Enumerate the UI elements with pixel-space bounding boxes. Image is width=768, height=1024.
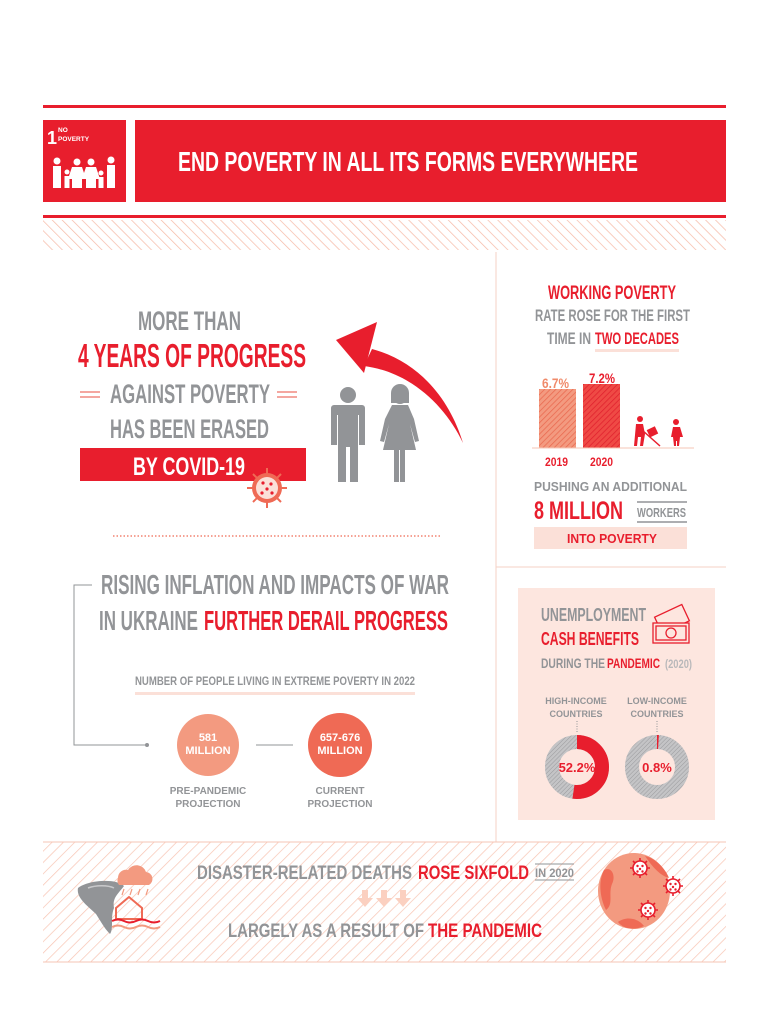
arrow: curved red (336, 322, 463, 443)
hatched band (43, 215, 726, 250)
donut chart: high-income: HIGH-INCOME (545, 696, 607, 706)
panel: unemployment cash benefits: (2020) (665, 657, 692, 671)
title banner (135, 120, 726, 202)
top red line (43, 105, 726, 108)
bar chart: 2020 (590, 455, 613, 469)
logo: SDG 1 no poverty (43, 120, 126, 202)
bar chart: 2019 (545, 455, 568, 469)
panel: disaster-related deaths: ROSE SIXFOLD (418, 863, 529, 884)
panel: disaster-related deaths: THE PANDEMIC (428, 921, 542, 942)
donut chart: high-income: COUNTRIES (549, 709, 603, 719)
icon: cash (653, 605, 689, 643)
chart: extreme poverty 2022: NUMBER OF PEOPLE LIVING IN EXTREME POVERTY IN 2022 (135, 674, 415, 688)
donut chart: high-income: 52.2% (559, 760, 596, 775)
panel: rising inflation: RISING INFLATION AND IMPACTS OF WAR (101, 569, 449, 600)
icon: tornado and flood (78, 865, 160, 934)
icon: workers (634, 416, 683, 446)
panel: 4 years of progress: BY COVID-19 (133, 453, 245, 481)
bar chart (532, 370, 694, 469)
chart: extreme poverty 2022: MILLION (317, 745, 363, 757)
panel: working poverty: TIME IN (547, 329, 591, 348)
logo: SDG 1 no poverty: POVERTY (58, 136, 90, 143)
panel: working poverty: WORKERS (637, 505, 686, 520)
bar chart: 7.2% (589, 370, 615, 386)
chart: extreme poverty 2022: PRE-PANDEMIC (170, 786, 246, 797)
panel: working poverty (532, 283, 694, 549)
panel: rising inflation: FURTHER DERAIL PROGRESS (204, 605, 448, 636)
panel: 4 years of progress (78, 306, 306, 481)
panel: disaster-related deaths: IN 2020 (535, 866, 574, 880)
donut chart: low-income: 0.8% (642, 760, 672, 775)
panel: working poverty: PUSHING AN ADDITIONAL (534, 479, 687, 494)
panel: 4 years of progress: HAS BEEN ERASED (110, 414, 269, 444)
chart: extreme poverty 2022: 657-676 (320, 732, 360, 744)
panel: disaster-related deaths (43, 842, 726, 962)
chart: extreme poverty 2022: PROJECTION (307, 799, 373, 810)
panel: 4 years of progress: MORE THAN (138, 306, 241, 336)
panel: working poverty: RATE ROSE FOR THE FIRST (535, 306, 690, 325)
panel: working poverty: 8 MILLION (534, 497, 623, 525)
dotted divider (113, 535, 440, 537)
panel: 4 years of progress: 4 YEARS OF PROGRESS (78, 337, 306, 374)
panel: unemployment cash benefits (518, 588, 715, 820)
panel: disaster-related deaths: DISASTER-RELATED DEATHS (197, 863, 412, 884)
chart: extreme poverty 2022: PROJECTION (175, 799, 241, 810)
panel: working poverty: WORKING POVERTY (548, 283, 676, 304)
donut chart: low-income: LOW-INCOME (627, 696, 687, 706)
icon: virus (247, 468, 287, 508)
panel: rising inflation: IN UKRAINE (99, 605, 198, 636)
panel: unemployment cash benefits: PANDEMIC (607, 655, 660, 671)
bar chart: 6.7% (542, 375, 569, 391)
panel: disaster-related deaths: LARGELY AS A RESULT OF (228, 921, 424, 942)
logo: SDG 1 no poverty: NO (58, 127, 68, 134)
donut chart: low-income (627, 696, 687, 792)
panel: working poverty: INTO POVERTY (567, 531, 657, 546)
donut chart: high-income (545, 696, 607, 792)
chart: extreme poverty 2022: MILLION (185, 745, 231, 757)
arrows down (357, 890, 411, 907)
panel: 4 years of progress: AGAINST POVERTY (110, 379, 270, 409)
panel: rising inflation (74, 569, 449, 747)
panel: unemployment cash benefits: UNEMPLOYMENT (541, 605, 646, 625)
panel: unemployment cash benefits: CASH BENEFITS (541, 629, 639, 649)
chart: extreme poverty 2022 (135, 674, 415, 810)
chart: extreme poverty 2022: 581 (199, 732, 217, 744)
icon: man and woman (331, 384, 419, 482)
chart: extreme poverty 2022: CURRENT (316, 786, 364, 797)
icon: globe with viruses (598, 853, 683, 929)
panel: working poverty: TWO DECADES (595, 329, 679, 348)
logo: SDG 1 no poverty: 1 (47, 128, 57, 148)
donut chart: low-income: COUNTRIES (630, 709, 684, 719)
dividers (495, 252, 497, 842)
panel: unemployment cash benefits: DURING THE (541, 655, 605, 671)
